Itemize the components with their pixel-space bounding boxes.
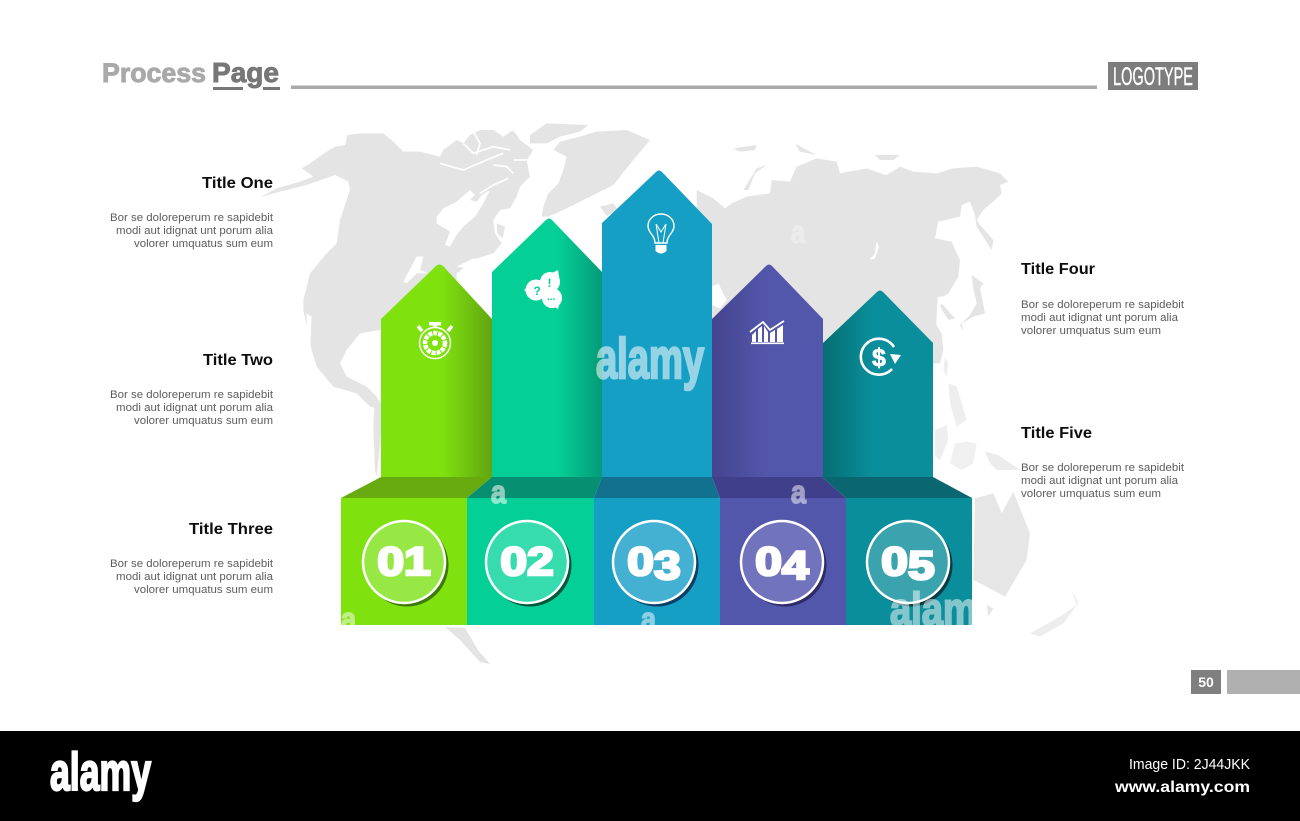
text block: title five: modi aut idignat unt porum alia <box>1021 475 1179 487</box>
arrow 2: teal green <box>492 218 602 478</box>
watermark: small marks: a <box>491 474 506 510</box>
text block: title three: Title Three <box>189 521 273 538</box>
badge 01 <box>363 521 448 606</box>
heading: Process <box>102 58 206 88</box>
watermark: small marks <box>341 485 972 625</box>
world map <box>260 123 1078 664</box>
badge 02 <box>486 521 572 606</box>
text block: title one: volorer umquatus sum eum <box>134 238 273 250</box>
watermark: small marks: alamy <box>890 583 998 635</box>
text block: title three: modi aut idignat unt porum alia <box>116 571 274 583</box>
badge 03: 3 <box>654 544 681 588</box>
text block: title one <box>110 175 274 250</box>
badge 03 <box>613 521 698 606</box>
text block: title three: volorer umquatus sum eum <box>134 584 273 596</box>
footer band <box>0 731 1300 821</box>
watermark: small marks: a <box>341 601 356 637</box>
arrow 1: green <box>381 264 492 478</box>
text block: title five <box>1021 425 1184 500</box>
badge 04 <box>741 521 826 606</box>
icon: dollar cycle <box>861 339 901 375</box>
text block: title four: Title Four <box>1021 261 1095 278</box>
text block: title two <box>110 352 274 427</box>
heading: Page <box>212 57 279 88</box>
badge 02: 02 <box>500 540 554 584</box>
text block: title three: Bor se doloreperum re sapidebit <box>110 558 273 570</box>
text block: title three <box>110 521 274 596</box>
icon: speech bubbles: ... <box>547 292 556 303</box>
text block: title four: Bor se doloreperum re sapidebit <box>1021 299 1184 311</box>
badge 04: 4 <box>782 544 809 588</box>
badge 03: 0 <box>627 540 654 584</box>
text block: title five: Title Five <box>1021 425 1092 442</box>
icon: speech bubbles <box>524 270 562 309</box>
text block: title two: Title Two <box>203 352 273 369</box>
watermark: small marks: a <box>791 474 806 510</box>
text block: title four: volorer umquatus sum eum <box>1021 325 1161 337</box>
text block: title five: volorer umquatus sum eum <box>1021 488 1161 500</box>
text block: title two: Bor se doloreperum re sapidebit <box>110 389 273 401</box>
badge 05 <box>867 521 952 606</box>
badge 05: 0 <box>881 540 908 584</box>
header rule <box>291 86 1097 89</box>
arrow 3: blue <box>602 170 712 478</box>
icon: light bulb <box>648 214 674 254</box>
badge 01: 01 <box>377 540 431 584</box>
image id: Image ID: 2J44JKK <box>1129 756 1250 773</box>
page bar <box>1227 670 1300 694</box>
text block: title two: volorer umquatus sum eum <box>134 415 273 427</box>
icon: bar chart with line <box>750 321 784 344</box>
watermark: small marks: a <box>641 601 656 637</box>
icon: stopwatch with gear <box>418 322 452 358</box>
text block: title one: Bor se doloreperum re sapidebit <box>110 212 273 224</box>
page number: 50 <box>1198 674 1214 690</box>
text block: title one: modi aut idignat unt porum alia <box>116 225 274 237</box>
watermark: central alamy: alamy <box>596 327 704 391</box>
icon: speech bubbles: ! <box>548 276 552 290</box>
website: www.alamy.com <box>1114 779 1250 796</box>
text block: title five: Bor se doloreperum re sapidebit <box>1021 462 1184 474</box>
block top faces <box>341 477 972 498</box>
footer logo: alamy <box>50 743 151 802</box>
text block: title two: modi aut idignat unt porum alia <box>116 402 274 414</box>
icon: dollar cycle: $ <box>872 344 886 372</box>
text block: title four <box>1021 261 1184 337</box>
logotype: LOGOTYPE <box>1113 63 1193 91</box>
badge 04: 0 <box>755 540 782 584</box>
watermark: small marks: a <box>791 214 805 250</box>
badge 05: 5 <box>908 544 935 588</box>
arrow 4: indigo <box>712 264 823 478</box>
block front faces <box>341 498 972 625</box>
icon: speech bubbles: ? <box>534 284 541 298</box>
arrow 5: dark teal <box>823 290 933 478</box>
text block: title one: Title One <box>202 175 273 192</box>
arrow chart <box>341 170 972 625</box>
text block: title four: modi aut idignat unt porum alia <box>1021 312 1179 324</box>
heading <box>102 57 280 90</box>
page number <box>1191 670 1221 694</box>
logotype <box>1108 62 1198 91</box>
